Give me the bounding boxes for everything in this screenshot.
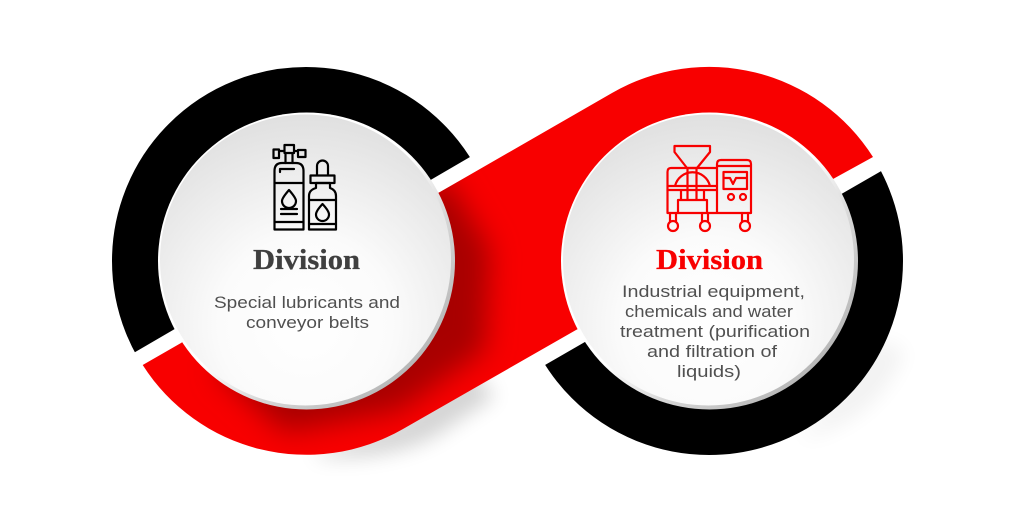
panel: right circle (561, 112, 858, 410)
text: right description: liquids) (677, 362, 741, 381)
red infinity band (143, 67, 873, 455)
shadow under red band (310, 340, 905, 457)
icon: lubricant bottles (274, 145, 336, 230)
text: left description: Special lubricants and (214, 293, 400, 312)
panel: left circle (158, 112, 455, 410)
left black ring segment (112, 67, 470, 352)
text: left description (214, 293, 400, 332)
text: left description: conveyor belts (246, 313, 369, 332)
heading: left division: Division (253, 245, 360, 276)
heading: right division: Division (656, 245, 763, 276)
text: right description: chemicals and water (625, 302, 793, 321)
text: right description: treatment (purification (620, 322, 810, 341)
text: right description: and filtration of (647, 342, 777, 361)
text: right description (620, 282, 810, 381)
icon: industrial machine (668, 146, 751, 231)
right black ring segment (545, 171, 903, 455)
text: right description: Industrial equipment, (622, 282, 805, 301)
